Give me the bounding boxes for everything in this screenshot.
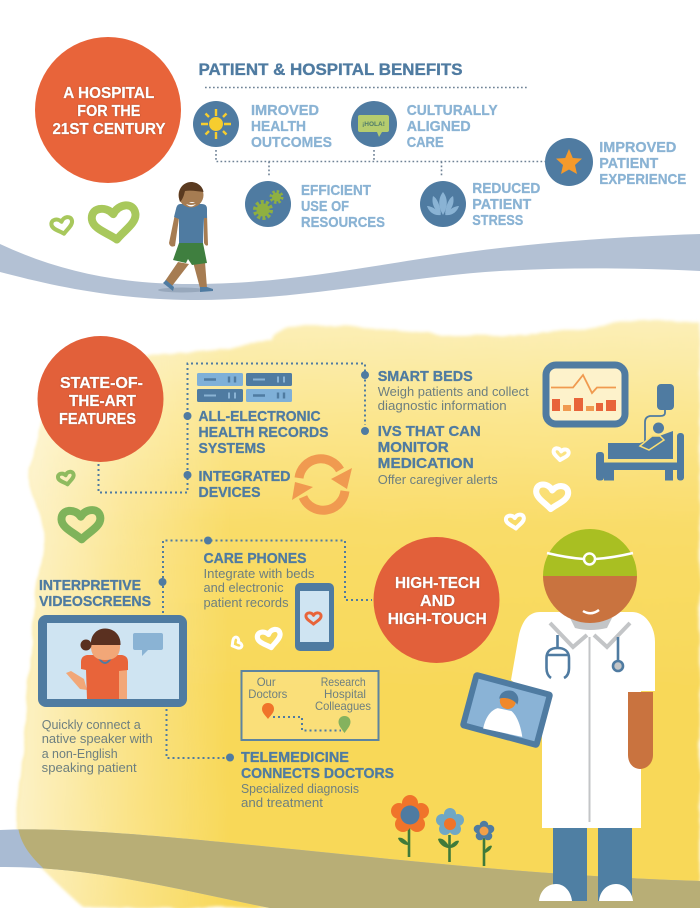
icon: stethoscope bbox=[546, 635, 623, 678]
text: quickly connect: a non-English bbox=[42, 746, 118, 761]
icon: white hearts, upper right bbox=[506, 448, 569, 529]
benefit: culturally aligned care: CULTURALLY bbox=[407, 102, 498, 119]
text: telemedicine connects doctors bbox=[241, 749, 394, 810]
icon: sun bbox=[201, 109, 231, 139]
text: telemedicine connects doctors: Specialized diagnosis bbox=[241, 781, 359, 796]
icon: lotus bbox=[427, 192, 459, 215]
benefit: efficient use of resources: USE OF bbox=[301, 198, 349, 215]
benefit: reduced patient stress bbox=[420, 180, 540, 229]
flower: medium blue bbox=[436, 808, 464, 862]
text: smart beds: Weigh patients and collect bbox=[378, 384, 529, 399]
text: ivs that can monitor medication: Offer caregiver alerts bbox=[378, 472, 498, 487]
benefit: improved patient experience: EXPERIENCE bbox=[599, 171, 686, 188]
text: integrated devices bbox=[198, 468, 291, 501]
text: smart beds bbox=[378, 368, 529, 413]
telemedicine map box bbox=[242, 671, 378, 740]
flower: small blue bbox=[474, 821, 494, 866]
benefit: culturally aligned care bbox=[351, 101, 498, 151]
benefit: improved patient experience bbox=[545, 138, 686, 188]
text: care phones: and electronic bbox=[204, 580, 284, 595]
text: smart beds: diagnostic information bbox=[378, 398, 507, 413]
circle: state of the art features: THE-ART bbox=[69, 393, 136, 410]
icon: green hearts, top bbox=[51, 204, 139, 243]
doctor figure bbox=[459, 529, 655, 901]
icon: care phone bbox=[295, 583, 334, 651]
icon: hola speech bubble bbox=[358, 115, 389, 137]
benefit: improved health outcomes bbox=[193, 101, 332, 151]
text: interpretive videoscreens: INTERPRETIVE bbox=[39, 577, 141, 594]
lower connector lines bbox=[158, 536, 372, 762]
benefit: efficient use of resources bbox=[245, 181, 385, 231]
boy shoes bbox=[163, 280, 213, 292]
doctor arm bbox=[628, 692, 653, 769]
icon: star bbox=[556, 149, 582, 174]
circle: high-tech and high-touch bbox=[374, 537, 500, 663]
icon: hola speech bubble: ¡HOLA! bbox=[362, 121, 385, 128]
icon: white hearts, middle bbox=[229, 628, 283, 651]
circle: high-tech and high-touch: HIGH-TECH bbox=[395, 575, 480, 592]
text: interpretive videoscreens bbox=[39, 577, 151, 610]
features connector lines bbox=[98, 364, 369, 492]
benefit: efficient use of resources: RESOURCES bbox=[301, 214, 385, 231]
text: quickly connect: speaking patient bbox=[42, 760, 137, 775]
icon: green pin bbox=[338, 716, 350, 733]
text: all-electronic health records systems: HEALTH RECORDS bbox=[198, 424, 328, 441]
boy arms bbox=[169, 214, 208, 247]
heading: patient and hospital benefits: PATIENT & HOSPITAL BENEFITS bbox=[198, 60, 462, 79]
top wave band bbox=[0, 234, 700, 300]
benefits connector lines bbox=[205, 88, 546, 177]
benefit: reduced patient stress: REDUCED bbox=[472, 180, 540, 197]
text: ivs that can monitor medication: IVS THAT CAN bbox=[378, 423, 481, 440]
telemedicine map box: Our bbox=[257, 675, 276, 689]
text: integrated devices: INTEGRATED bbox=[198, 468, 291, 485]
benefit: reduced patient stress: PATIENT bbox=[472, 196, 531, 213]
icon: vital signs monitor bbox=[546, 365, 625, 424]
benefit: improved health outcomes: IMROVED bbox=[251, 102, 319, 119]
tablet bbox=[459, 671, 554, 749]
benefit: improved health outcomes: HEALTH bbox=[251, 118, 306, 135]
icon: green hearts, left bbox=[57, 471, 101, 540]
text: ivs that can monitor medication: MEDICATION bbox=[378, 455, 474, 472]
telemedicine map box: Hospital bbox=[324, 687, 366, 701]
text: quickly connect: Quickly connect a bbox=[42, 717, 141, 732]
text: ivs that can monitor medication bbox=[378, 423, 498, 487]
benefit: reduced patient stress: STRESS bbox=[472, 212, 523, 229]
text: interpretive videoscreens: VIDEOSCREENS bbox=[39, 593, 151, 610]
text: smart beds: SMART BEDS bbox=[378, 368, 473, 385]
bottom wave band bbox=[0, 829, 700, 908]
text: ivs that can monitor medication: MONITOR bbox=[378, 439, 449, 456]
boy shirt bbox=[174, 204, 207, 243]
text: care phones: Integrate with beds bbox=[204, 566, 315, 581]
text: all-electronic health records systems bbox=[198, 408, 328, 457]
text: all-electronic health records systems: SYSTEMS bbox=[198, 440, 266, 457]
icon: refresh arrows bbox=[292, 459, 352, 510]
boy shorts bbox=[173, 243, 207, 265]
benefit: culturally aligned care: CARE bbox=[407, 134, 444, 151]
icon: patient in bed with iv bbox=[596, 384, 684, 480]
text: care phones bbox=[204, 550, 315, 610]
icon: walking boy bbox=[158, 182, 213, 292]
icon: orange pin bbox=[262, 703, 274, 719]
benefit: improved patient experience: IMPROVED bbox=[599, 139, 676, 156]
telemedicine map box: Research bbox=[321, 675, 366, 689]
doctor neck and collar bbox=[570, 618, 612, 630]
boy head bbox=[178, 182, 204, 208]
doctor shoes bbox=[539, 884, 633, 901]
doctor head bbox=[543, 529, 637, 623]
icon: video screen with interpreter bbox=[38, 615, 187, 707]
flowers bbox=[391, 795, 494, 866]
text: quickly connect bbox=[42, 717, 153, 775]
text: care phones: CARE PHONES bbox=[204, 550, 306, 567]
text: all-electronic health records systems: ALL-ELECTRONIC bbox=[198, 408, 321, 425]
circle: a hospital for the 21st century: FOR THE bbox=[77, 103, 141, 120]
text: telemedicine connects doctors: and treatment bbox=[241, 795, 323, 810]
text: care phones: patient records bbox=[204, 595, 289, 610]
circle: state of the art features: FEATURES bbox=[59, 411, 136, 428]
telemedicine map box: Colleagues bbox=[315, 699, 371, 713]
benefit: culturally aligned care: ALIGNED bbox=[407, 118, 471, 135]
text: quickly connect: native speaker with bbox=[42, 731, 153, 746]
doctor legs bbox=[553, 826, 632, 901]
benefit: efficient use of resources: EFFICIENT bbox=[301, 182, 371, 199]
benefit: improved patient experience: PATIENT bbox=[599, 155, 658, 172]
circle: state of the art features: STATE-OF- bbox=[60, 375, 143, 392]
yellow watercolor background bbox=[17, 319, 700, 908]
flower: large orange bbox=[391, 795, 429, 857]
benefit: improved health outcomes: OUTCOMES bbox=[251, 134, 332, 151]
text: integrated devices: DEVICES bbox=[198, 484, 260, 501]
circle: a hospital for the 21st century bbox=[35, 37, 181, 183]
boy legs bbox=[165, 262, 207, 288]
icon: gears bbox=[255, 192, 282, 218]
circle: high-tech and high-touch: HIGH-TOUCH bbox=[388, 611, 487, 628]
text: telemedicine connects doctors: CONNECTS DOCTORS bbox=[241, 765, 394, 782]
doctor coat bbox=[511, 612, 655, 828]
circle: high-tech and high-touch: AND bbox=[420, 593, 455, 610]
circle: a hospital for the 21st century: A HOSPITAL bbox=[63, 85, 155, 102]
icon: servers bbox=[197, 373, 292, 402]
circle: state of the art features bbox=[38, 336, 164, 462]
text: telemedicine connects doctors: TELEMEDICINE bbox=[241, 749, 349, 766]
circle: a hospital for the 21st century: 21ST CENTURY bbox=[52, 121, 166, 138]
telemedicine map box: Doctors bbox=[248, 687, 287, 701]
